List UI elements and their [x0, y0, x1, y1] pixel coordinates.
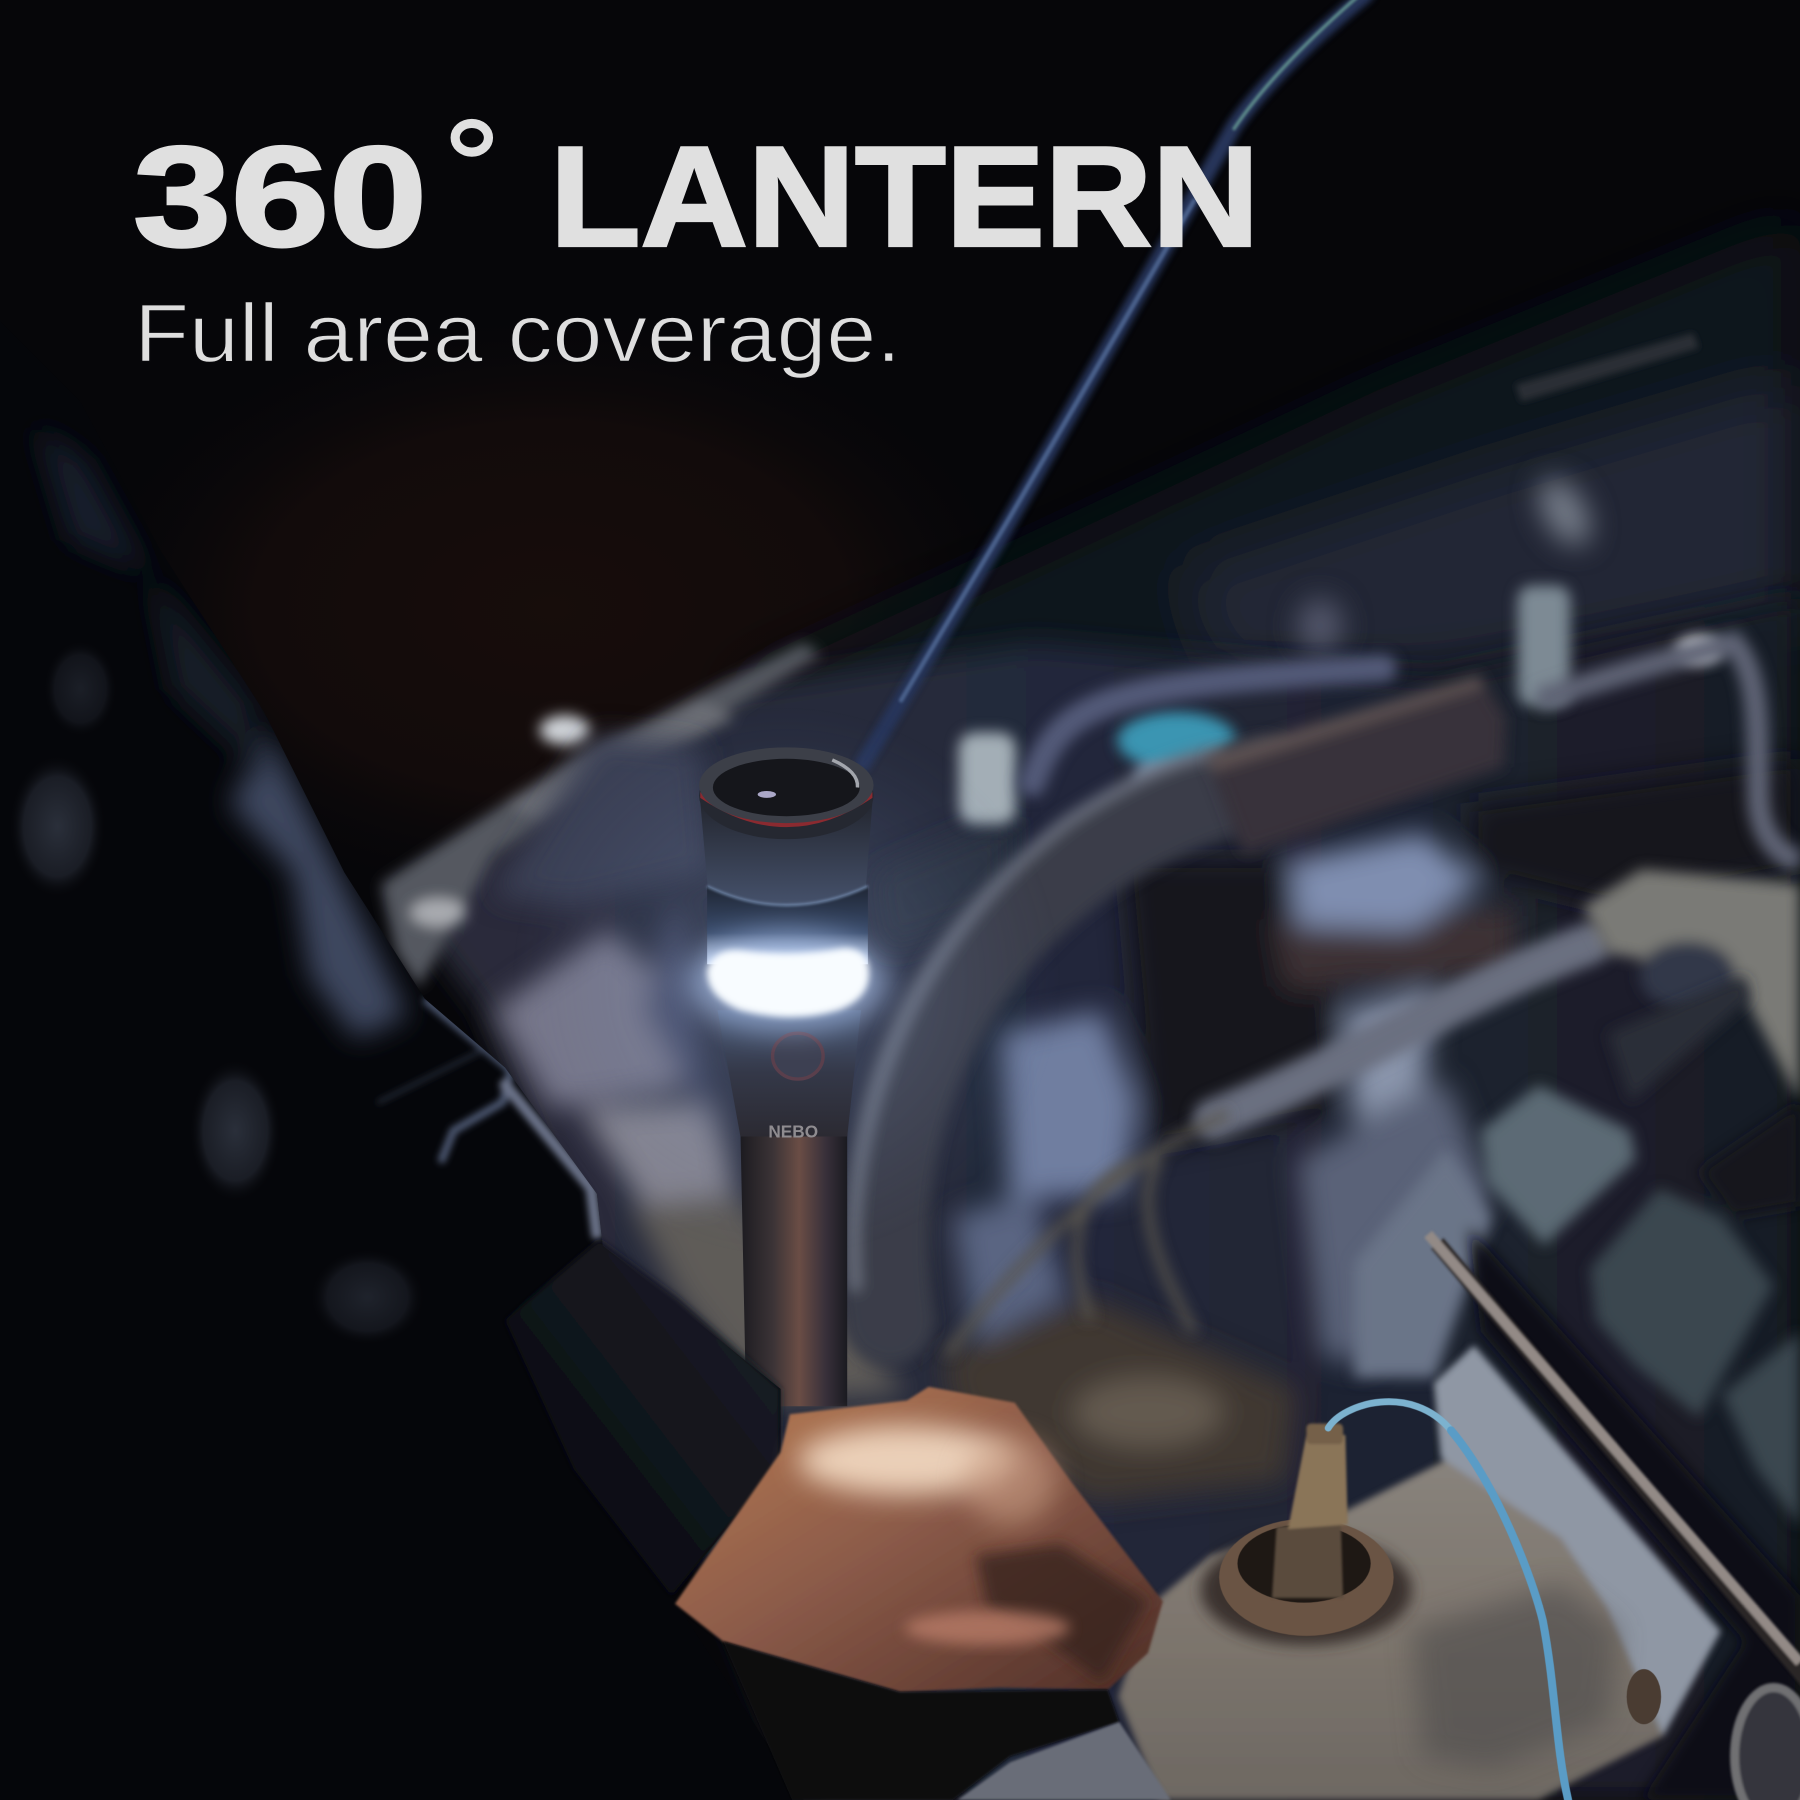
flashlight: head bezel — [699, 752, 874, 839]
sensor: threaded plug — [1272, 1423, 1348, 1598]
engine hose: upper pipe — [1032, 668, 1383, 783]
engine rail: diagonal metal bar — [1428, 1234, 1800, 1683]
hood prop rod — [863, 0, 1366, 763]
flashlight: lens — [713, 759, 860, 816]
title: degree ring — [455, 123, 488, 152]
engine hose: wide rubber section — [1207, 675, 1506, 855]
pale metal bottom edge — [957, 1722, 1171, 1800]
hood underside: faint strip — [1515, 333, 1699, 402]
dark object below hand — [723, 1642, 1119, 1800]
hand: knuckle shadow — [976, 1544, 1148, 1682]
title: 360° LANTERN: LANTERN — [550, 118, 1259, 277]
flashlight: red ring — [700, 792, 872, 827]
person: sleeve highlights — [34, 425, 597, 1234]
flashlight — [686, 747, 889, 1406]
engine dark gap: beside rail — [1469, 1228, 1800, 1800]
flashlight: neck with switch — [717, 1010, 861, 1136]
engine hose: large curved hose — [854, 752, 1263, 1320]
engine part: pale fitting — [959, 732, 1016, 824]
flashlight: lens rim — [699, 747, 874, 823]
engine coils: dark housings — [1355, 976, 1800, 1527]
engine part: right fitting — [1518, 585, 1722, 706]
valve bolt — [1627, 1669, 1661, 1724]
engine hose: diagonal pipe — [1213, 944, 1590, 1119]
round housing: bottom right — [1735, 1688, 1800, 1800]
subtitle: Full area coverage. — [134, 287, 901, 380]
engine hose: right pipe — [1538, 643, 1800, 861]
engine detail: blurred parts — [494, 470, 1800, 1504]
flashlight: rubber collar — [707, 886, 868, 964]
person: hand — [675, 1387, 1163, 1692]
flashlight: NEBO logo: NEBO — [768, 1122, 818, 1142]
hand: knuckle light — [964, 1437, 1056, 1524]
title: 360° LANTERN: 360 — [133, 118, 427, 277]
valve cover: shaded recess — [1412, 1584, 1619, 1768]
flashlight: lower grip — [740, 1131, 847, 1406]
valve cover: pale metal casting — [1118, 1345, 1721, 1800]
flashlight: power button — [773, 1033, 823, 1079]
engine cover: top right — [1583, 869, 1800, 1102]
engine part: cyan reservoir cap — [1117, 712, 1236, 792]
hand: finger light band — [905, 1611, 1070, 1645]
valve cover: pale bluish rib — [1434, 1345, 1721, 1736]
engine bay: base mass — [396, 597, 1800, 1800]
flashlight: upper barrel — [700, 801, 872, 907]
flashlight: collar lit edge — [707, 886, 868, 905]
hood underside — [735, 218, 1800, 804]
person: sleeve bokeh spots — [9, 641, 425, 1345]
flashlight: rim glint — [832, 760, 858, 788]
hood edge: lit front lip — [381, 643, 821, 987]
flashlight: lens glint — [758, 791, 776, 798]
person: knit cuff — [505, 1240, 781, 1596]
oil port: rusty ring — [1201, 1519, 1412, 1645]
blue wire — [1328, 1402, 1568, 1800]
hand: wrist highlight — [798, 1426, 1016, 1495]
flashlight: lantern band — [686, 931, 889, 1032]
title: 360° LANTERN — [133, 118, 1259, 277]
person: black sleeve — [0, 321, 804, 1800]
lantern glow on surroundings — [511, 706, 1062, 1257]
engine wires: tan bundle — [947, 1114, 1228, 1355]
background: brown glow behind hood — [57, 298, 1045, 918]
